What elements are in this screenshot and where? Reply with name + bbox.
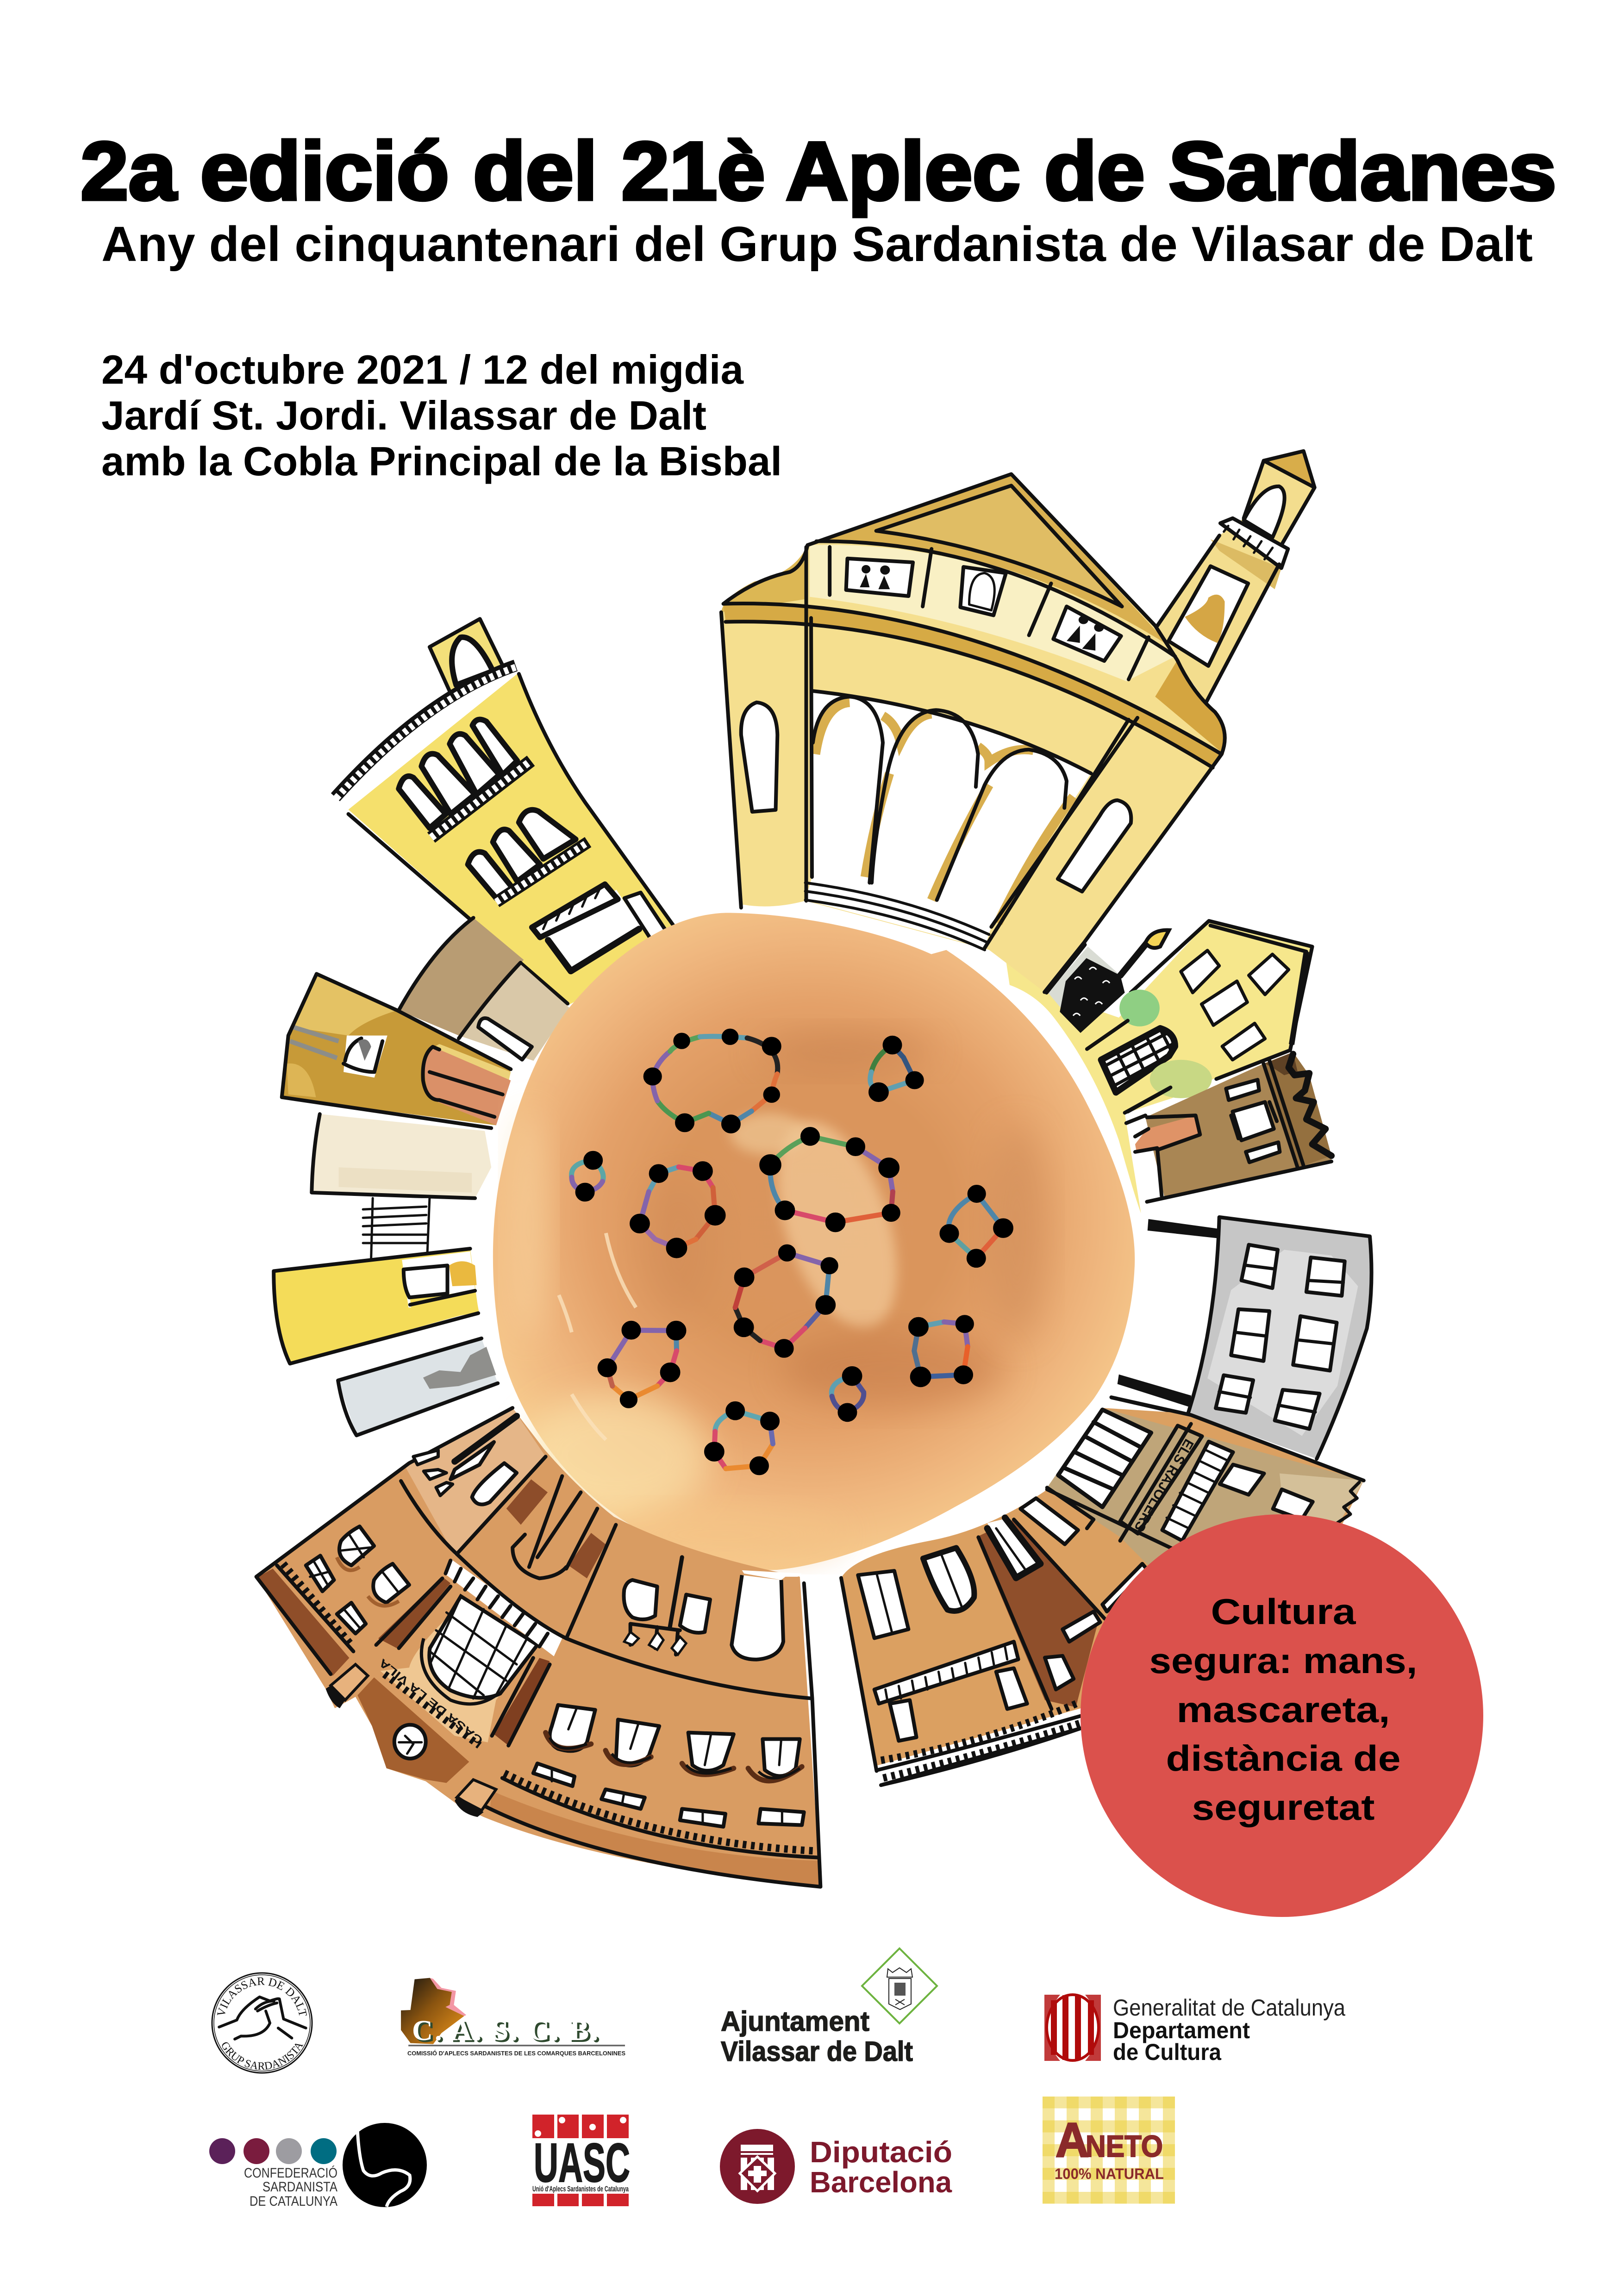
logo: Ajuntament Vilassar de Dalt: Ajuntament	[721, 2006, 869, 2037]
event details: amb la Cobla Principal de la Bisbal	[101, 438, 782, 484]
ring of dancers 5	[761, 1128, 899, 1231]
cream house	[312, 1114, 491, 1198]
callout: safety message: seguretat	[1192, 1787, 1375, 1828]
ring of dancers 8	[599, 1322, 685, 1407]
logo: Generalitat de Catalunya	[1044, 1995, 1345, 2065]
logo: UASC: UASC	[534, 2132, 630, 2194]
illustration: left-hand houses	[274, 918, 569, 1435]
logo: UASC: Unió d'Aplecs Sardanistes de Catalunya	[532, 2184, 629, 2193]
illustration: yellow square and brown castle-house right	[1001, 902, 1331, 1213]
callout: safety message	[1081, 1514, 1483, 1917]
logo: Aneto: A	[1056, 2113, 1089, 2167]
logo: Grup Sardanista Vilassar de Dalt	[212, 1973, 312, 2073]
ring of dancers 2	[870, 1037, 923, 1101]
logo: Grup Sardanista Vilassar de Dalt: VILASSAR DE DALT	[215, 1975, 309, 2018]
building 1 windows	[306, 1556, 334, 1591]
label: CASA DE LA VILA: CASA DE LA VILA	[376, 1656, 486, 1747]
logo: C.A.S.C.B.: C. A. S. C. B.	[412, 2015, 598, 2047]
lower windows	[533, 1705, 804, 1827]
logo: Confederació Sardanista de Catalunya: DE CATALUNYA	[250, 2194, 337, 2209]
ring of dancers 3	[572, 1152, 603, 1201]
logo: Confederació Sardanista de Catalunya: SARDANISTA	[262, 2179, 337, 2195]
illustration: main church	[721, 474, 1225, 992]
callout: safety message: segura: mans,	[1149, 1640, 1418, 1681]
logo: Ajuntament Vilassar de Dalt: Vilassar de Dalt	[721, 2036, 913, 2067]
building 2 windows and lamp	[450, 1442, 494, 1479]
illustration: yellow building top left	[335, 619, 680, 1005]
logo: Aneto	[1043, 2097, 1175, 2204]
logo: Generalitat de Catalunya: Generalitat de Catalunya	[1113, 1995, 1345, 2021]
posts	[331, 1664, 368, 1700]
ring of dancers 4	[631, 1163, 725, 1257]
arches ochre washes	[816, 703, 1073, 923]
upper tan house	[1058, 1410, 1151, 1507]
logo: UASC	[532, 2115, 630, 2206]
logo: Grup Sardanista Vilassar de Dalt: GRUP SARDANISTA	[219, 2040, 306, 2072]
callout: safety message: Cultura	[1211, 1591, 1356, 1632]
hatch	[372, 1198, 430, 1258]
middle floor lamps and windows	[624, 1580, 657, 1619]
illustration: town hall houses bottom left	[256, 1408, 820, 1887]
ring of dancers 10	[831, 1368, 864, 1421]
ring of dancers 7	[735, 1245, 837, 1356]
event details: Jardí St. Jordi. Vilassar de Dalt	[101, 392, 706, 438]
title: 2a edició del 21è Aplec de Sardanes	[81, 125, 1556, 217]
ochre house	[282, 974, 511, 1125]
logo: Generalitat de Catalunya: Departament	[1113, 2017, 1250, 2043]
illustration: grey building right	[1112, 1217, 1372, 1459]
callout: safety message: distància de	[1166, 1738, 1401, 1779]
logo: Generalitat de Catalunya: de Cultura	[1113, 2039, 1222, 2065]
illustration: bell tower	[1157, 451, 1315, 703]
logo: Aneto: NETO	[1086, 2129, 1163, 2163]
structure lines	[256, 1408, 812, 1699]
logo: Diputació Barcelona: Barcelona	[810, 2165, 952, 2199]
event details	[101, 347, 782, 484]
logo: Diputació Barcelona	[720, 2129, 952, 2204]
illustration: central plaza watercolour	[493, 913, 1135, 1570]
ring of dancers 9	[910, 1316, 973, 1386]
logo: Ajuntament Vilassar de Dalt	[721, 1948, 937, 2067]
grey house	[338, 1338, 498, 1435]
big grid window	[429, 1596, 537, 1698]
logo: C.A.S.C.B.	[401, 1978, 625, 2057]
label: ELS RAJOLERS: ELS RAJOLERS	[1131, 1437, 1197, 1534]
ring of dancers 6	[941, 1186, 1012, 1267]
ring of dancers 1	[644, 1030, 780, 1132]
logo: Confederació Sardanista de Catalunya: CONFEDERACIÓ	[244, 2165, 337, 2181]
subtitle: Any del cinquantenari del Grup Sardanista de Vilasar de Dalt	[101, 216, 1533, 272]
logo: Aneto: 100% NATURAL	[1055, 2165, 1164, 2182]
callout: safety message: mascareta,	[1177, 1689, 1390, 1730]
bright yellow house	[274, 1249, 478, 1363]
clock	[394, 1725, 426, 1759]
brown castle house	[1145, 1052, 1331, 1198]
logo: C.A.S.C.B.: COMISSIÓ D'APLECS SARDANISTES DE LES COMARQUES BARCELONINES	[407, 2050, 625, 2057]
illustration: brown houses bottom right	[841, 1397, 1364, 1785]
illustration: dancers in rings	[572, 1030, 1012, 1474]
logo: Diputació Barcelona: Diputació	[810, 2135, 952, 2169]
logo: Confederació Sardanista de Catalunya	[209, 2123, 427, 2209]
ring of dancers 11	[705, 1402, 779, 1474]
event details: 24 d'octubre 2021 / 12 del migdia	[101, 347, 744, 392]
logo: C.A.S.C.B.: C. A. S. C. B.	[414, 2016, 600, 2048]
